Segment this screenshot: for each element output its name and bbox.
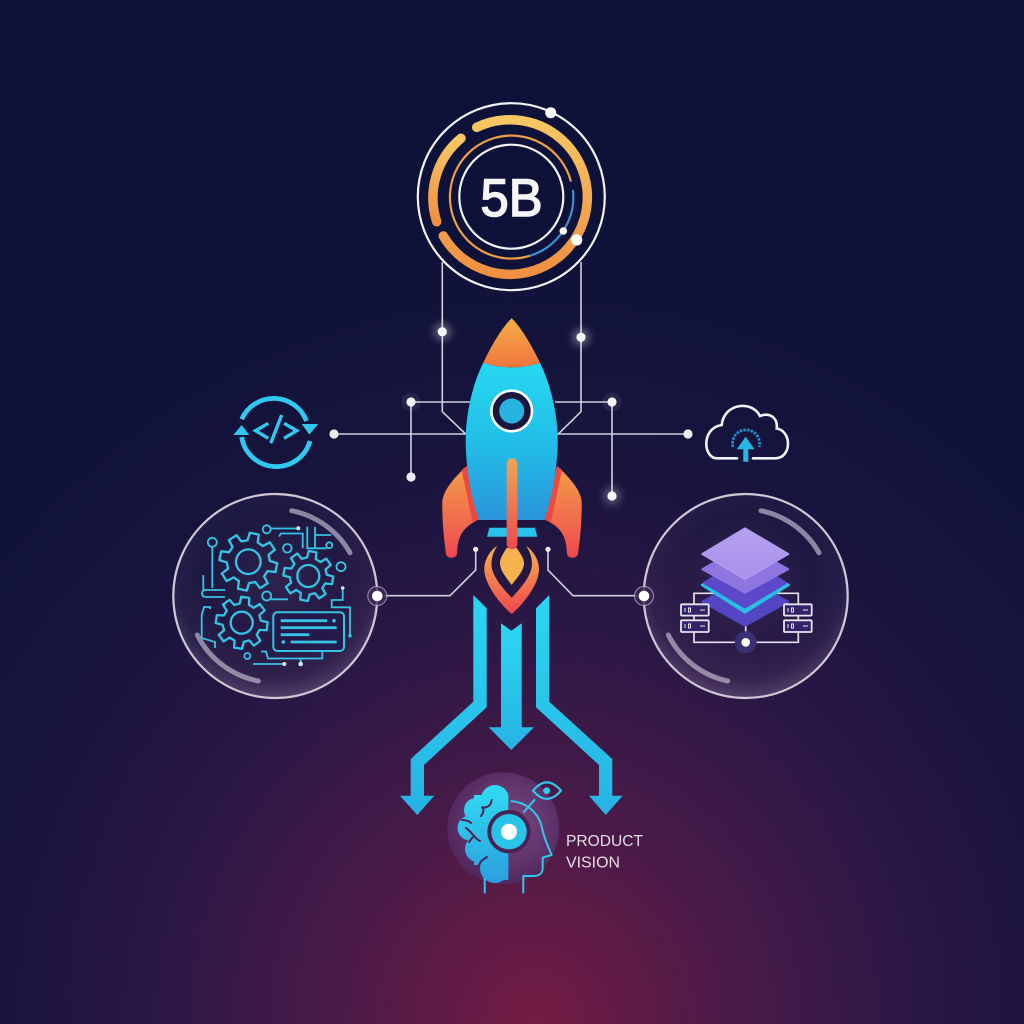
icon: AI head with brain	[447, 772, 561, 893]
eye	[533, 782, 561, 799]
orange outer arc segments	[433, 120, 587, 274]
centre bar	[507, 458, 517, 549]
brain lobes	[458, 785, 514, 883]
brain folds	[462, 800, 492, 866]
connector nodes	[329, 323, 693, 552]
left arrow	[400, 595, 487, 815]
bubble highlights	[668, 511, 819, 681]
trace dots	[282, 526, 352, 666]
left fin	[442, 466, 479, 558]
rocket	[442, 318, 582, 614]
metric ring: 5B	[418, 103, 605, 290]
right arrow	[536, 595, 623, 815]
icon: cloud upload	[706, 406, 788, 462]
focus lens	[487, 810, 531, 853]
thin progress arcs	[450, 136, 573, 259]
servers	[681, 604, 812, 632]
head outline	[485, 799, 552, 893]
right fin	[544, 466, 582, 558]
base node	[735, 631, 757, 653]
icon: code cycle	[233, 398, 318, 467]
panel: layers bubble	[644, 494, 848, 698]
nose cone	[483, 318, 540, 367]
stacked layers	[702, 528, 789, 626]
body	[466, 363, 558, 520]
code card	[273, 612, 344, 651]
label: product vision	[566, 833, 643, 872]
value text: 5B	[480, 169, 542, 228]
flame inner	[500, 548, 524, 585]
bubble highlights	[197, 511, 350, 681]
downward arrows	[400, 595, 623, 815]
panel: gears bubble	[173, 494, 377, 698]
nozzle	[487, 528, 537, 537]
server links	[694, 593, 798, 642]
label: product vision: PRODUCT	[566, 833, 643, 850]
porthole	[491, 391, 532, 431]
centre arrow	[489, 623, 534, 750]
node: right bubble	[634, 586, 654, 606]
label: product vision: VISION	[566, 854, 620, 872]
gears	[213, 528, 337, 652]
circuit traces	[202, 525, 350, 664]
node: left bubble	[368, 586, 387, 606]
connector lines network	[334, 262, 688, 596]
flame outer	[484, 546, 539, 614]
